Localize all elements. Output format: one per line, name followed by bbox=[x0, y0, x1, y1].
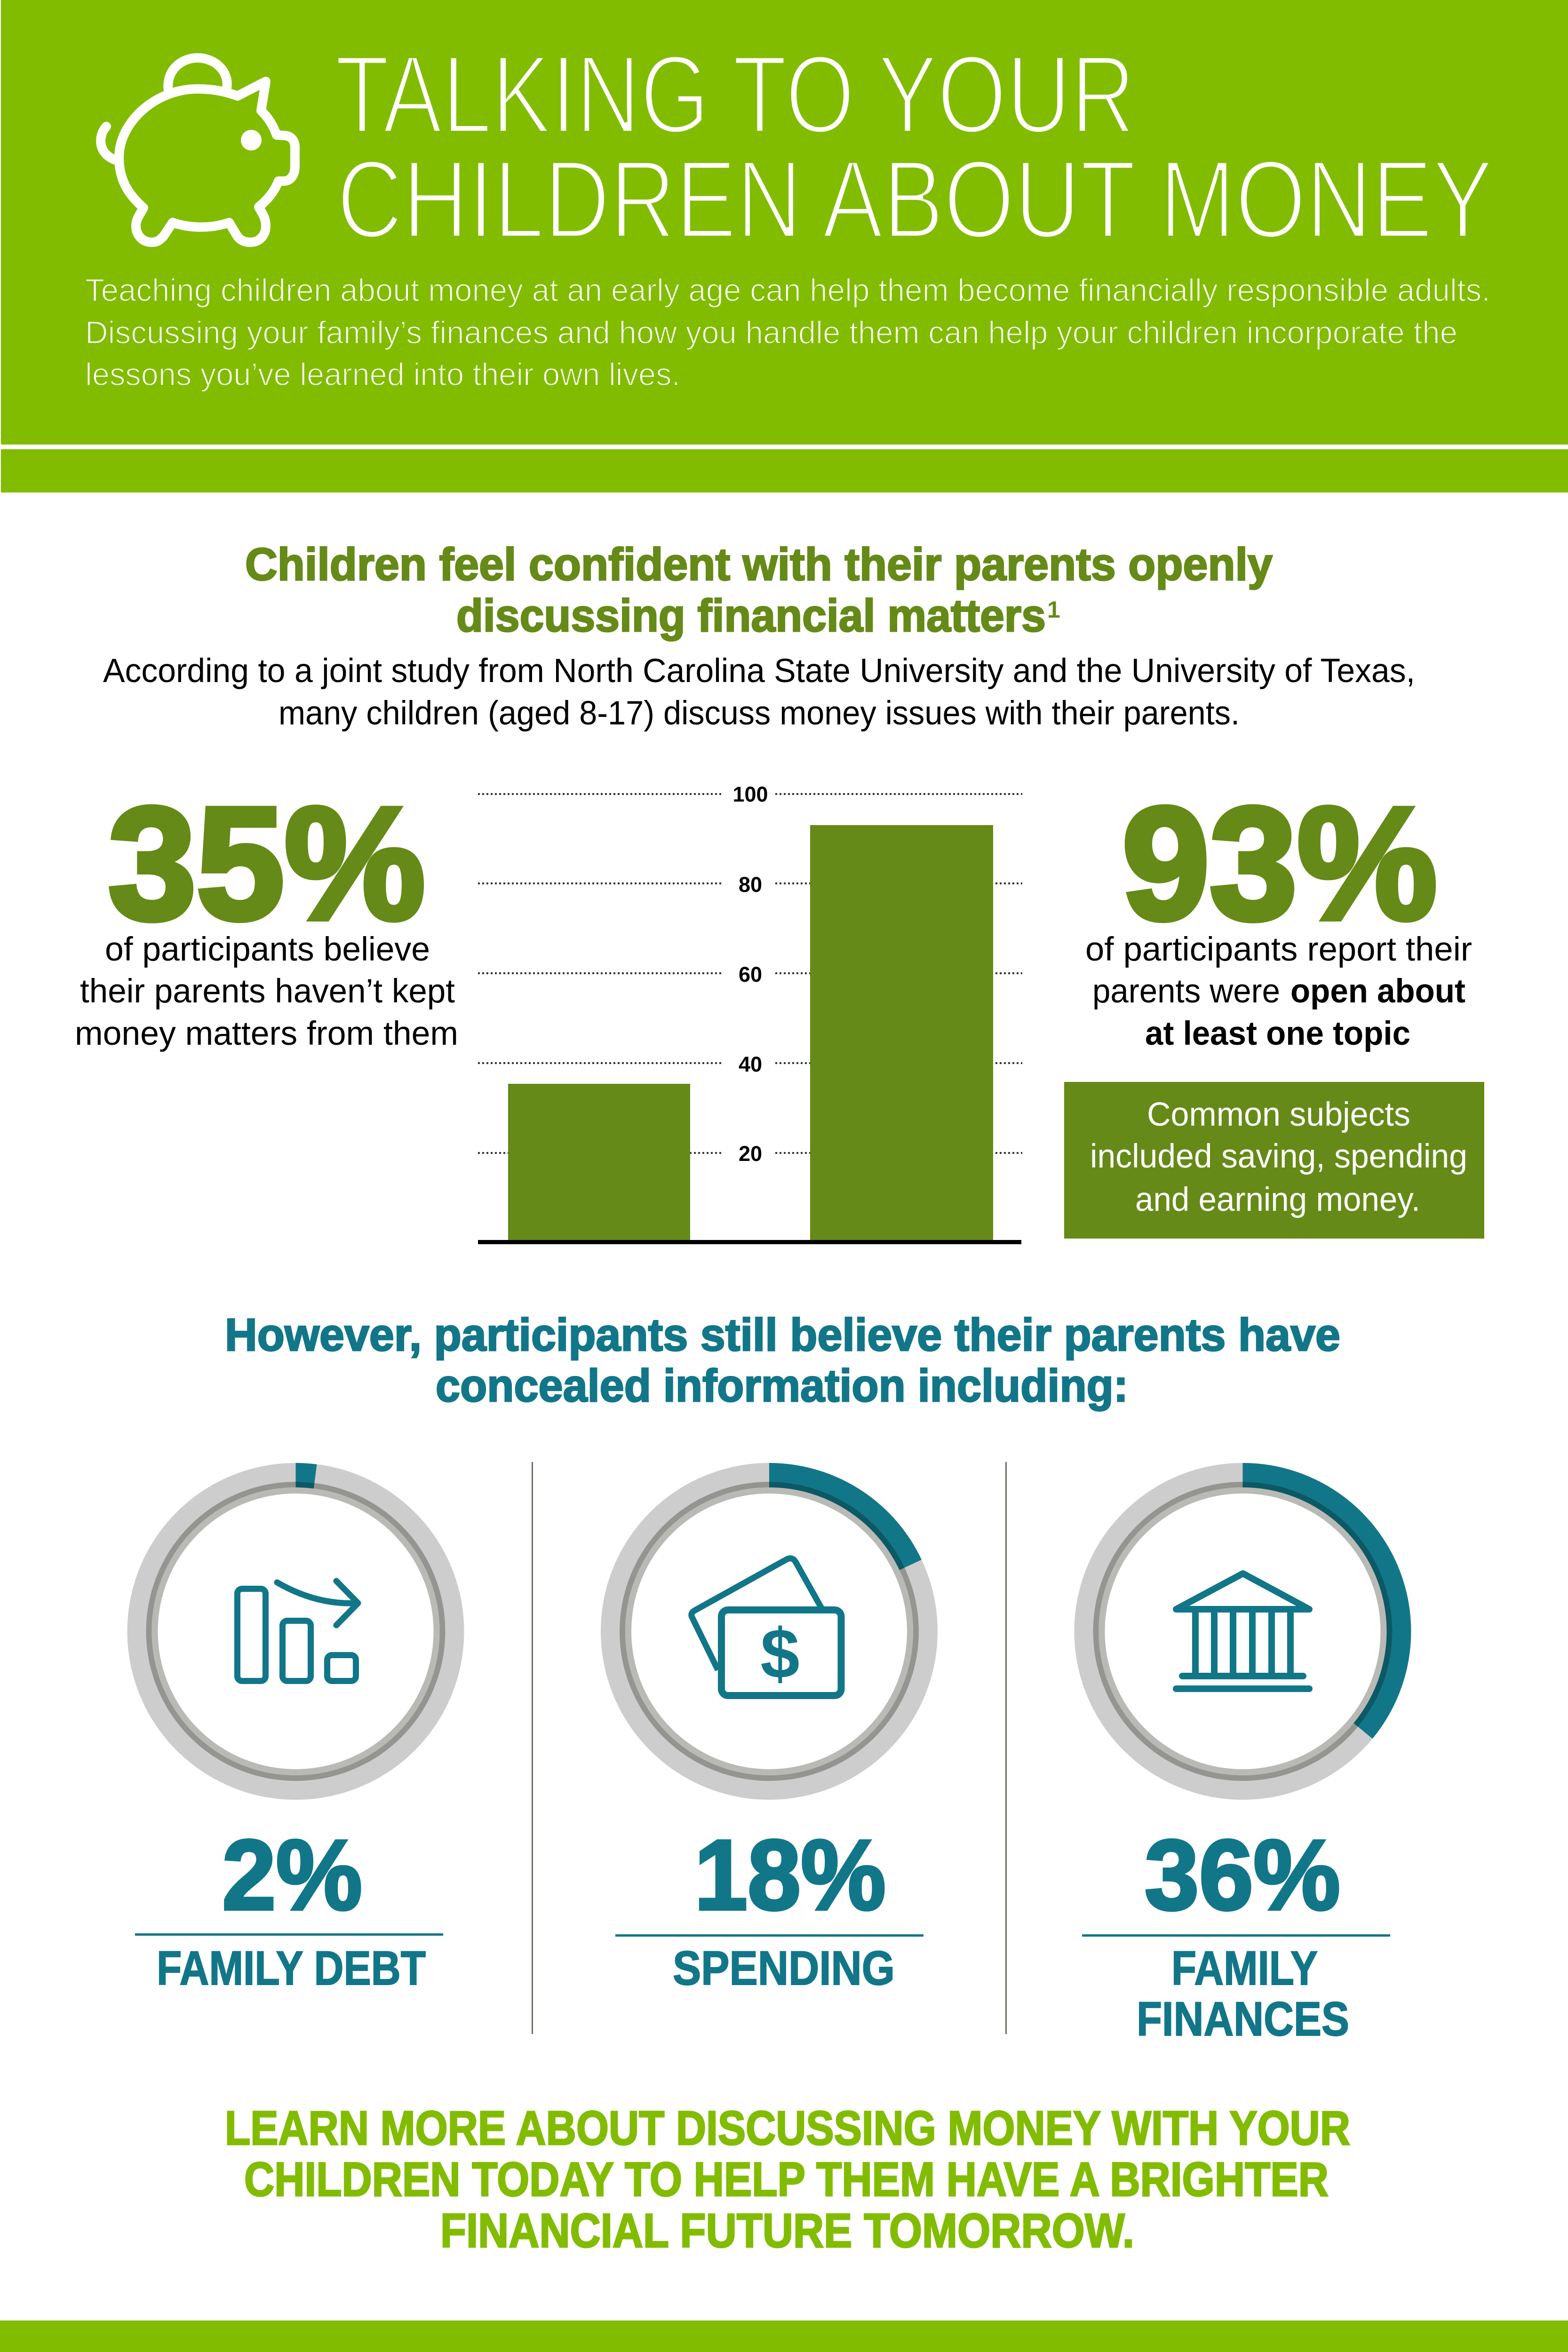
stat: 93 percent: at least one topic bbox=[1145, 1015, 1410, 1052]
axis baseline bbox=[478, 1240, 1021, 1244]
axis labels: 100 bbox=[732, 782, 768, 806]
stat: 35 percent: of participants believe bbox=[105, 931, 430, 968]
bar: 93 percent bbox=[810, 825, 993, 1240]
stat: family finances: 36% bbox=[1145, 1819, 1340, 1931]
bar chart bbox=[478, 782, 1022, 1244]
stat: spending: SPENDING bbox=[673, 1941, 895, 1995]
stat: family debt bbox=[135, 1819, 443, 1995]
title bbox=[335, 32, 1493, 262]
intro paragraph: lessons you’ve learned into their own lives. bbox=[85, 357, 680, 392]
stat: 93 percent: 93% bbox=[1122, 774, 1437, 953]
icon: declining bars with arrow bbox=[237, 1581, 358, 1681]
ring: family finances 36 percent bbox=[1084, 1472, 1402, 1790]
ring: spending 18 percent bbox=[610, 1472, 928, 1790]
panel: green footer bbox=[0, 2320, 1568, 2352]
stat: 93 percent: open about bbox=[1290, 973, 1465, 1010]
panel: green header bbox=[1, 0, 1568, 493]
intro paragraph: Teaching children about money at an early age can help them become financially responsible adults. bbox=[85, 272, 1490, 308]
stat: 93 percent: of participants report their bbox=[1085, 931, 1472, 968]
axis labels: 80 bbox=[739, 873, 762, 897]
callout: common subjects bbox=[1064, 1082, 1484, 1239]
stat: spending: 18% bbox=[694, 1819, 886, 1931]
heading: children feel confident: Children feel confident with their parents openly bbox=[245, 539, 1273, 590]
stat: 35 percent bbox=[75, 774, 458, 1052]
callout: common subjects: Common subjects bbox=[1147, 1096, 1410, 1133]
stat: 35 percent: 35% bbox=[108, 774, 425, 953]
dividers bbox=[532, 1462, 1007, 2034]
stat: family debt: 2% bbox=[222, 1819, 362, 1931]
ring: family debt 2 percent bbox=[136, 1472, 454, 1790]
stat: family finances bbox=[1082, 1819, 1390, 2046]
call to action bbox=[225, 2101, 1350, 2257]
icon: money bills bbox=[692, 1558, 841, 1695]
axis labels bbox=[732, 782, 768, 1166]
heading: children feel confident: 1 bbox=[1047, 596, 1060, 623]
callout: common subjects: and earning money. bbox=[1135, 1181, 1420, 1218]
heading: children feel confident bbox=[245, 539, 1273, 641]
heading: children feel confident: discussing financial matters bbox=[456, 590, 1046, 641]
bar: 35 percent bbox=[508, 1084, 690, 1240]
call to action: CHILDREN TODAY TO HELP THEM HAVE A BRIGHTER bbox=[244, 2153, 1329, 2206]
axis labels: 40 bbox=[739, 1052, 762, 1076]
stat: 93 percent: parents were bbox=[1092, 973, 1280, 1010]
stat: 93 percent bbox=[1085, 774, 1472, 1052]
intro paragraph: Discussing your family’s finances and how you handle them can help your children incorporate the bbox=[85, 315, 1457, 350]
stat: family finances: FINANCES bbox=[1137, 1992, 1349, 2046]
study introduction text bbox=[103, 652, 1415, 732]
callout: common subjects: included saving, spending bbox=[1090, 1138, 1467, 1175]
stat: spending bbox=[615, 1819, 923, 1995]
stat: family finances: FAMILY bbox=[1171, 1941, 1318, 1995]
axis labels: 20 bbox=[739, 1142, 762, 1166]
heading: concealed information bbox=[225, 1309, 1340, 1411]
call to action: FINANCIAL FUTURE TOMORROW. bbox=[440, 2204, 1134, 2257]
title: TALKING TO YOUR bbox=[335, 32, 1135, 157]
heading: concealed information: However, participants still believe their parents have bbox=[225, 1309, 1340, 1360]
icon: money bills: $ bbox=[760, 1614, 800, 1693]
stat: 35 percent: money matters from them bbox=[75, 1015, 458, 1052]
stat: family debt: FAMILY DEBT bbox=[157, 1941, 426, 1995]
icon: piggy bank bbox=[101, 58, 295, 242]
axis labels: 60 bbox=[739, 962, 762, 986]
icon: bank building bbox=[1176, 1573, 1309, 1689]
study introduction text: According to a joint study from North Carolina State University and the University of Texas, bbox=[103, 652, 1415, 690]
study introduction text: many children (aged 8-17) discuss money issues with their parents. bbox=[279, 695, 1240, 732]
heading: concealed information: concealed information including: bbox=[436, 1360, 1128, 1411]
call to action: LEARN MORE ABOUT DISCUSSING MONEY WITH YOUR bbox=[225, 2101, 1350, 2155]
intro paragraph bbox=[85, 272, 1490, 392]
stat: 35 percent: their parents haven’t kept bbox=[80, 973, 455, 1010]
